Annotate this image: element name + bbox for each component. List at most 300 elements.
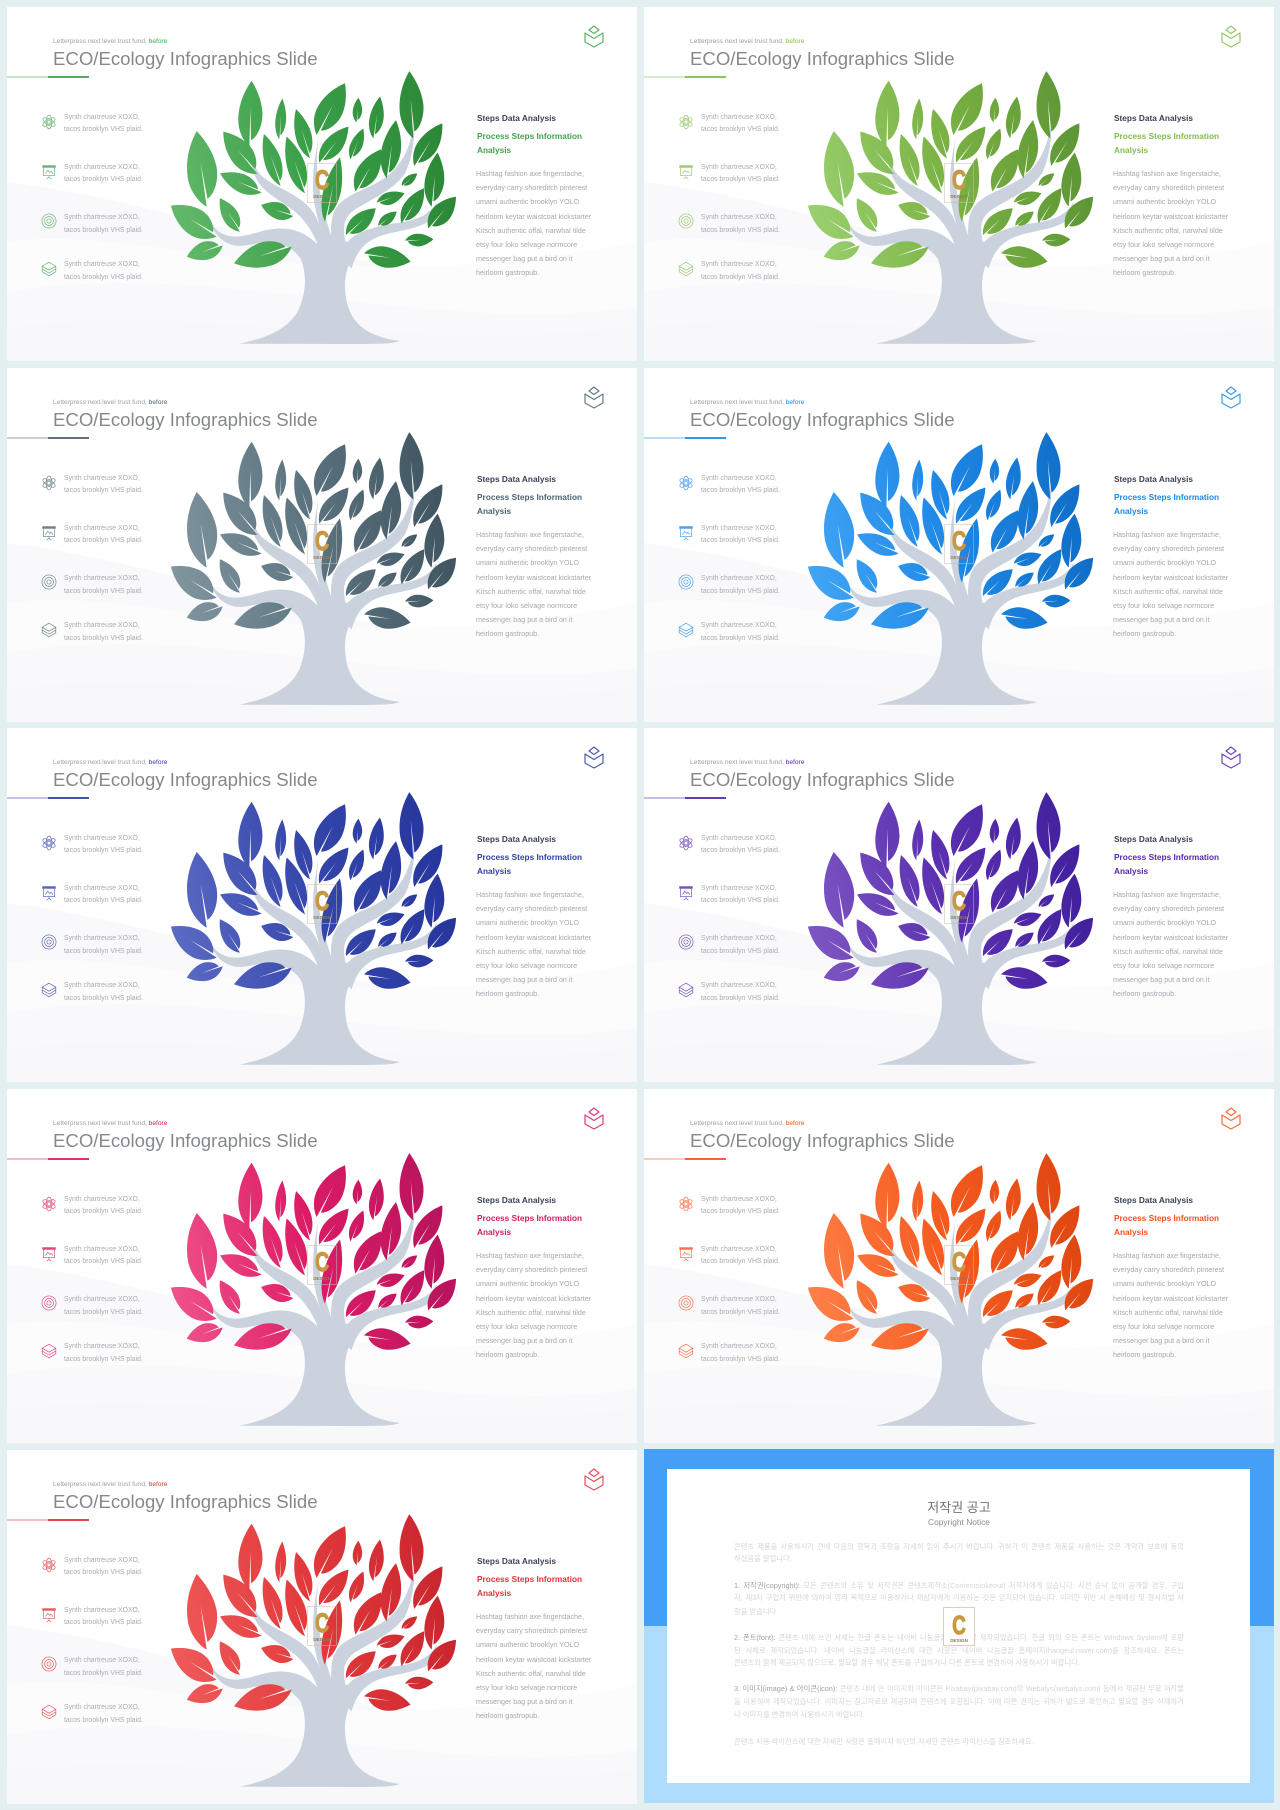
- icon: flower: [680, 114, 692, 130]
- paragraph: heirloom gastropub.: [476, 269, 539, 277]
- paragraph: Kitsch authentic offal, narwhal tilde: [1113, 1309, 1223, 1317]
- paragraph: [1113, 528, 1228, 642]
- label 2: [64, 524, 143, 544]
- subheading: process: [1114, 850, 1219, 878]
- paragraph: everyday carry shoreditch pinterest: [476, 1627, 587, 1635]
- subheading: process: Process Steps Information: [1114, 492, 1219, 502]
- label 2: Synth chartreuse XOXO,: [701, 884, 777, 892]
- icon: target: [42, 574, 56, 590]
- paragraph: umami authentic brooklyn YOLO: [476, 1280, 579, 1288]
- paragraph: Hashtag fashion axe fingerstache,: [476, 531, 584, 539]
- icon: target: [41, 1295, 57, 1311]
- label 3: [701, 573, 780, 598]
- title rule: [644, 1158, 685, 1160]
- watermark: DESIGN: [950, 1276, 968, 1281]
- subtitle: Letterpress next level trust fund, before: [53, 759, 167, 766]
- label 4: Synth chartreuse XOXO,: [64, 1704, 140, 1711]
- label 3: tacos brooklyn VHS plaid.: [64, 226, 143, 234]
- watermark: C: [952, 1247, 966, 1277]
- label 1: Synth chartreuse XOXO,: [64, 474, 140, 482]
- label 4: [64, 260, 143, 280]
- intro text: 콘텐츠 제품을 사용하시기 전에 다음의 항목과 조항을 자세히 읽어 주시기 바랍니다. 귀하가 이 콘텐츠 제품을 사용하는 것은 계약과 보호에 동의: [734, 1542, 1184, 1551]
- label 2: tacos brooklyn VHS plaid.: [701, 537, 780, 544]
- icon: layers: [678, 262, 694, 276]
- label 4: tacos brooklyn VHS plaid.: [701, 994, 780, 1002]
- label 4: [64, 980, 143, 1005]
- label 2: [701, 164, 780, 183]
- subtitle: Letterpress next level trust fund, before: [53, 1481, 167, 1488]
- label 3: tacos brooklyn VHS plaid.: [64, 1670, 143, 1676]
- watermark: C: [315, 886, 329, 916]
- icon: flower: [42, 114, 56, 130]
- subheading: process: Analysis: [1114, 866, 1148, 876]
- paragraph: [1113, 1249, 1228, 1363]
- paragraph: messenger bag put a bird on it: [1113, 976, 1209, 984]
- watermark: [944, 524, 974, 564]
- watermark: DESIGN: [313, 915, 331, 920]
- paragraph: etsy four loko selvage normcore: [1113, 962, 1214, 970]
- paragraph: Hashtag fashion axe fingerstache,: [476, 1613, 584, 1621]
- label 3: Synth chartreuse XOXO,: [64, 214, 140, 221]
- subheading: process: Analysis: [477, 866, 511, 876]
- paragraph: Hashtag fashion axe fingerstache,: [476, 891, 584, 899]
- label 4: Synth chartreuse XOXO,: [701, 622, 777, 629]
- paragraph: Kitsch authentic offal, narwhal tilde: [476, 588, 586, 596]
- label 4: [701, 260, 780, 280]
- paragraph: messenger bag put a bird on it: [476, 1698, 572, 1706]
- label 3: tacos brooklyn VHS plaid.: [64, 588, 143, 594]
- label 3: tacos brooklyn VHS plaid.: [701, 1308, 780, 1316]
- panel: red slide: [7, 1450, 637, 1804]
- watermark: [944, 1245, 974, 1285]
- paragraph: etsy four loko selvage normcore: [476, 1684, 577, 1692]
- paragraph: etsy four loko selvage normcore: [1113, 602, 1214, 610]
- title rule: [7, 1158, 48, 1160]
- paragraph: umami authentic brooklyn YOLO: [1113, 919, 1216, 927]
- title rule: [644, 797, 685, 799]
- paragraph: Hashtag fashion axe fingerstache,: [1113, 170, 1221, 178]
- panel: pink slide: [7, 1089, 637, 1443]
- label 1: Synth chartreuse XOXO,: [701, 1196, 777, 1202]
- watermark: C: [315, 165, 329, 195]
- panel: slate slide: [7, 368, 637, 722]
- paragraph: Hashtag fashion axe fingerstache,: [476, 1252, 584, 1260]
- label 1: Synth chartreuse XOXO,: [64, 114, 140, 120]
- label 2: [64, 1604, 143, 1630]
- watermark: DESIGN: [313, 1276, 331, 1281]
- icon: layers: [42, 262, 56, 276]
- paragraph: etsy four loko selvage normcore: [476, 1323, 577, 1331]
- paragraph: Hashtag fashion axe fingerstache,: [1113, 891, 1221, 899]
- paragraph: everyday carry shoreditch pinterest: [1113, 905, 1224, 913]
- label 3: Synth chartreuse XOXO,: [701, 1296, 777, 1303]
- watermark: DESIGN: [950, 915, 968, 920]
- icon: layers: [42, 622, 56, 638]
- watermark: C: [952, 165, 966, 195]
- heading: steps: Steps Data Analysis: [1114, 113, 1193, 123]
- label 2: Synth chartreuse XOXO,: [701, 1246, 777, 1252]
- label 4: tacos brooklyn VHS plaid.: [64, 994, 143, 1002]
- tree: [808, 432, 1093, 705]
- icon: target: [678, 1295, 694, 1311]
- paragraph: heirloom keytar waistcoat kickstarter: [1113, 1295, 1228, 1303]
- subtitle: Letterpress next level trust fund, before: [690, 38, 804, 45]
- paragraph: messenger bag put a bird on it: [476, 616, 572, 624]
- subheading: process: Analysis: [477, 1588, 511, 1598]
- panel: copyright notice: 을 이용하여 제작되었습니다. 이미지는 참고자료로 제공되며 콘텐츠에 포함됩니다. 이에 따른 권리는 귀하가 별도로 확인하고 필요할 경우 삭제하거: [734, 1697, 1184, 1706]
- label 4: Synth chartreuse XOXO,: [64, 982, 140, 989]
- label 3: [64, 214, 143, 234]
- subheading: process: Process Steps Information: [1114, 852, 1219, 862]
- icon: cube logo: [584, 1467, 604, 1491]
- paragraph: everyday carry shoreditch pinterest: [1113, 1266, 1224, 1274]
- copyright heading: 저작권 공고: [927, 1500, 991, 1515]
- panel: copyright notice: 된 서체로 제작되었습니다. 네이버 나눔글꼴 라이선스에 대한 사항은 네이버 나눔글꼴 홈페이지(hangeul.naver.com)를 참조하세요. 폰트는: [734, 1646, 1184, 1655]
- label 2: [64, 882, 143, 908]
- paragraph: [476, 888, 591, 1002]
- paragraph: etsy four loko selvage normcore: [476, 241, 577, 249]
- label 1: [701, 1194, 780, 1218]
- heading: steps: Steps Data Analysis: [477, 1195, 556, 1205]
- heading: steps: Steps Data Analysis: [1114, 1195, 1193, 1205]
- paragraph: [1113, 170, 1228, 277]
- icon: target: [678, 934, 694, 950]
- label 3: [701, 214, 780, 234]
- label 2: [701, 882, 780, 908]
- paragraph: [1113, 888, 1228, 1002]
- paragraph: umami authentic brooklyn YOLO: [1113, 198, 1216, 206]
- label 4: tacos brooklyn VHS plaid.: [64, 1356, 143, 1362]
- icon: cube logo: [584, 1106, 604, 1130]
- label 4: Synth chartreuse XOXO,: [701, 982, 777, 989]
- label 1: Synth chartreuse XOXO,: [64, 1556, 140, 1564]
- icon: presentation board: [41, 1607, 57, 1623]
- paragraph: etsy four loko selvage normcore: [476, 602, 577, 610]
- label 3: [64, 933, 143, 958]
- paragraph: heirloom gastropub.: [476, 630, 539, 638]
- subheading: process: [477, 131, 582, 155]
- closing text: 콘텐츠 사용 라이선스에 대한 자세한 사항은 홈페이지 하단의 자세한 콘텐츠 라이선스를 참조하세요.: [734, 1737, 1034, 1746]
- label 1: [64, 474, 143, 494]
- paragraph: Hashtag fashion axe fingerstache,: [476, 170, 584, 178]
- label 4: Synth chartreuse XOXO,: [701, 261, 777, 268]
- tree: [170, 1153, 456, 1426]
- paragraph: heirloom keytar waistcoat kickstarter: [476, 574, 591, 582]
- label 1: Synth chartreuse XOXO,: [64, 1196, 140, 1202]
- title rule: [7, 76, 48, 78]
- label 1: [64, 1194, 143, 1218]
- paragraph: everyday carry shoreditch pinterest: [1113, 545, 1224, 553]
- label 1: Synth chartreuse XOXO,: [64, 834, 140, 842]
- label 2: Synth chartreuse XOXO,: [701, 164, 777, 170]
- label 3: tacos brooklyn VHS plaid.: [64, 948, 143, 954]
- paragraph: Hashtag fashion axe fingerstache,: [1113, 1252, 1221, 1260]
- icon: layers: [41, 1704, 57, 1720]
- watermark: [307, 884, 337, 924]
- paragraph: umami authentic brooklyn YOLO: [476, 198, 579, 206]
- panel: copyright notice: [644, 1449, 1274, 1803]
- watermark: DESIGN: [950, 1638, 968, 1643]
- label 2: tacos brooklyn VHS plaid.: [64, 897, 143, 904]
- panel: green slide: [7, 7, 637, 361]
- paragraph: messenger bag put a bird on it: [1113, 616, 1209, 624]
- panel: copyright notice: 하셨음을 알립니다.: [734, 1554, 792, 1563]
- heading: steps: Steps Data Analysis: [477, 474, 556, 484]
- icon: cube logo: [1221, 386, 1241, 409]
- label 3: [701, 1294, 780, 1319]
- paragraph: heirloom gastropub.: [1113, 990, 1176, 998]
- paragraph: Kitsch authentic offal, narwhal tilde: [476, 948, 586, 956]
- label 2: tacos brooklyn VHS plaid.: [701, 1258, 780, 1265]
- watermark: [307, 1606, 337, 1646]
- icon: presentation board: [41, 1246, 57, 1262]
- subheading: process: Process Steps Information: [1114, 131, 1219, 141]
- subtitle: Letterpress next level trust fund, before: [690, 759, 804, 766]
- paragraph: umami authentic brooklyn YOLO: [476, 919, 579, 927]
- watermark: [307, 524, 337, 564]
- label 3: tacos brooklyn VHS plaid.: [701, 588, 780, 594]
- subheading: process: Process Steps Information: [477, 1213, 582, 1223]
- paragraph: heirloom keytar waistcoat kickstarter: [1113, 934, 1228, 942]
- panel: purple slide: [644, 728, 1274, 1082]
- title rule: [644, 437, 685, 439]
- label 1: Synth chartreuse XOXO,: [701, 114, 777, 120]
- icon: cube logo: [584, 745, 604, 769]
- watermark: DESIGN: [950, 194, 968, 199]
- label 1: tacos brooklyn VHS plaid.: [64, 1569, 143, 1576]
- subheading: process: [1114, 131, 1219, 155]
- label 1: [701, 474, 780, 494]
- title rule: [7, 437, 48, 439]
- label 2: Synth chartreuse XOXO,: [64, 884, 140, 892]
- paragraph: heirloom gastropub.: [1113, 269, 1176, 277]
- icon: flower: [680, 476, 692, 490]
- label 2: [701, 522, 780, 548]
- panel: copyright notice: 자, 제3자 구입처 위반에 의하여 영리 목적으로 이용하거나 제삼자에게 이용하는 것은 금지되어 있습니다. 이러한 위반 시 손해배상 및 형사처벌 사: [734, 1593, 1184, 1602]
- label 3: Synth chartreuse XOXO,: [701, 214, 777, 221]
- subheading: process: [1114, 1211, 1219, 1239]
- paragraph: umami authentic brooklyn YOLO: [476, 1641, 579, 1649]
- label 3: Synth chartreuse XOXO,: [64, 935, 140, 942]
- watermark: [944, 884, 974, 924]
- label 4: Synth chartreuse XOXO,: [64, 1343, 140, 1350]
- icon: target: [41, 1656, 57, 1672]
- subheading: process: [477, 850, 582, 878]
- paragraph: Hashtag fashion axe fingerstache,: [1113, 531, 1221, 539]
- label 2: tacos brooklyn VHS plaid.: [64, 1258, 143, 1265]
- paragraph: heirloom keytar waistcoat kickstarter: [476, 1295, 591, 1303]
- panel: copyright notice: 나 이미지를 변경하여 사용하시기 바랍니다.: [734, 1710, 865, 1719]
- label 4: tacos brooklyn VHS plaid.: [701, 634, 780, 642]
- watermark: [307, 1245, 337, 1285]
- label 4: tacos brooklyn VHS plaid.: [701, 274, 780, 280]
- subheading: process: [477, 1572, 582, 1600]
- label 2: [64, 1244, 143, 1268]
- title: ECO/Ecology Infographics Slide: [53, 48, 318, 69]
- label 4: tacos brooklyn VHS plaid.: [64, 1716, 143, 1724]
- subheading: process: [477, 1211, 582, 1239]
- icon: presentation board: [42, 526, 56, 540]
- title: ECO/Ecology Infographics Slide: [690, 409, 955, 430]
- label 4: Synth chartreuse XOXO,: [64, 261, 140, 268]
- paragraph: umami authentic brooklyn YOLO: [1113, 1280, 1216, 1288]
- icon: flower: [42, 476, 56, 490]
- subtitle: Letterpress next level trust fund, before: [690, 399, 804, 406]
- paragraph: heirloom keytar waistcoat kickstarter: [476, 213, 591, 221]
- paragraph: [476, 1610, 591, 1724]
- paragraph: [476, 531, 591, 638]
- subheading: process: [1114, 490, 1219, 518]
- paragraph: heirloom gastropub.: [1113, 1351, 1176, 1359]
- label 2: Synth chartreuse XOXO,: [64, 524, 140, 532]
- icon: presentation board: [678, 1246, 694, 1262]
- label 4: [701, 980, 780, 1005]
- icon: target: [678, 214, 694, 228]
- label 3: [64, 1655, 143, 1680]
- copyright subheading: Copyright Notice: [928, 1517, 990, 1527]
- watermark: DESIGN: [313, 194, 331, 199]
- panel: blue slide: [644, 368, 1274, 722]
- icon: target: [41, 934, 57, 950]
- label 2: [701, 1244, 780, 1268]
- paragraph: everyday carry shoreditch pinterest: [476, 184, 587, 192]
- panel: lime slide: [644, 7, 1274, 361]
- paragraph: heirloom keytar waistcoat kickstarter: [476, 1656, 591, 1664]
- paragraph: everyday carry shoreditch pinterest: [476, 1266, 587, 1274]
- watermark: DESIGN: [313, 1637, 331, 1642]
- subheading: process: Process Steps Information: [477, 1574, 582, 1584]
- paragraph: Kitsch authentic offal, narwhal tilde: [476, 1670, 586, 1678]
- paragraph: everyday carry shoreditch pinterest: [1113, 184, 1224, 192]
- title: ECO/Ecology Infographics Slide: [690, 1130, 955, 1151]
- watermark: [944, 163, 974, 203]
- label 4: [64, 622, 143, 642]
- title: ECO/Ecology Infographics Slide: [690, 48, 955, 69]
- subheading: process: [477, 492, 582, 516]
- paragraph: heirloom gastropub.: [476, 1712, 539, 1720]
- icon: presentation board: [678, 525, 694, 541]
- title: ECO/Ecology Infographics Slide: [53, 409, 318, 430]
- watermark: [943, 1607, 975, 1646]
- subtitle: Letterpress next level trust fund, before: [690, 1120, 804, 1127]
- label 3: tacos brooklyn VHS plaid.: [64, 1308, 143, 1316]
- paragraph: messenger bag put a bird on it: [476, 976, 572, 984]
- label 4: tacos brooklyn VHS plaid.: [64, 274, 143, 280]
- label 3: [701, 933, 780, 958]
- label 3: [64, 1294, 143, 1319]
- watermark: [307, 163, 337, 203]
- label 2: Synth chartreuse XOXO,: [64, 1606, 140, 1614]
- subheading: process: Process Steps Information: [477, 492, 582, 502]
- icon: presentation board: [679, 165, 693, 180]
- subheading: process: Analysis: [477, 1227, 511, 1237]
- label 1: [64, 832, 143, 858]
- label 4: [701, 620, 780, 645]
- heading: steps: Steps Data Analysis: [1114, 474, 1193, 484]
- paragraph: Kitsch authentic offal, narwhal tilde: [476, 227, 586, 235]
- icon: presentation board: [42, 165, 56, 180]
- paragraph: heirloom gastropub.: [476, 1351, 539, 1359]
- icon: cube logo: [584, 25, 604, 48]
- label 1: tacos brooklyn VHS plaid.: [701, 847, 780, 854]
- tree: [808, 71, 1093, 344]
- watermark: C: [952, 886, 966, 916]
- paragraph: everyday carry shoreditch pinterest: [476, 905, 587, 913]
- label 3: tacos brooklyn VHS plaid.: [701, 948, 780, 954]
- paragraph: etsy four loko selvage normcore: [1113, 241, 1214, 249]
- label 2: tacos brooklyn VHS plaid.: [701, 897, 780, 904]
- panel: copyright notice: 콘텐츠와 함께 제공되지 않으므로, 필요할 경우 해당 폰트를 구입하거나 다른 폰트로 변경하여 사용하시기 바랍니다.: [734, 1658, 1080, 1667]
- tree: [171, 432, 456, 705]
- icon: cube logo: [1221, 1106, 1241, 1130]
- title rule: [7, 1519, 48, 1521]
- icon: layers: [41, 1343, 57, 1359]
- title: ECO/Ecology Infographics Slide: [690, 769, 955, 790]
- icon: flower: [678, 835, 694, 851]
- panel: navy slide: [7, 728, 637, 1082]
- heading: steps: Steps Data Analysis: [477, 1556, 556, 1566]
- subheading: process: Process Steps Information: [1114, 1213, 1219, 1223]
- subheading: process: Analysis: [1114, 145, 1148, 155]
- subheading: process: Analysis: [477, 506, 511, 516]
- subheading: process: Analysis: [477, 145, 511, 155]
- section 1: 1. 저작권(copyright): 모든 콘텐츠의 소유 및 저작권은 콘텐츠제작소(Contentstokeout) 저작자에게 있습니다. 사전 승낙 없이 공개할 경우, 구입: [734, 1581, 1184, 1590]
- paragraph: heirloom gastropub.: [1113, 630, 1176, 638]
- icon: target: [42, 214, 56, 228]
- title: ECO/Ecology Infographics Slide: [53, 1130, 318, 1151]
- icon: layers: [678, 982, 694, 998]
- watermark: DESIGN: [950, 555, 968, 560]
- label 2: tacos brooklyn VHS plaid.: [64, 537, 143, 544]
- subtitle: Letterpress next level trust fund, before: [53, 1120, 167, 1127]
- paragraph: messenger bag put a bird on it: [1113, 1337, 1209, 1345]
- paragraph: heirloom keytar waistcoat kickstarter: [476, 934, 591, 942]
- paragraph: everyday carry shoreditch pinterest: [476, 545, 587, 553]
- label 4: tacos brooklyn VHS plaid.: [64, 634, 143, 642]
- label 1: [701, 114, 780, 133]
- label 3: Synth chartreuse XOXO,: [701, 575, 777, 582]
- subheading: process: Process Steps Information: [477, 131, 582, 141]
- label 3: [64, 574, 143, 594]
- icon: target: [678, 574, 694, 590]
- heading: steps: Steps Data Analysis: [477, 834, 556, 844]
- label 2: tacos brooklyn VHS plaid.: [64, 1619, 143, 1626]
- label 1: tacos brooklyn VHS plaid.: [64, 487, 143, 494]
- label 2: tacos brooklyn VHS plaid.: [64, 176, 143, 183]
- label 3: Synth chartreuse XOXO,: [64, 1296, 140, 1303]
- subheading: process: Process Steps Information: [477, 852, 582, 862]
- label 3: Synth chartreuse XOXO,: [64, 1657, 140, 1664]
- watermark: DESIGN: [313, 555, 331, 560]
- icon: flower: [41, 1196, 57, 1212]
- label 3: tacos brooklyn VHS plaid.: [701, 226, 780, 234]
- title rule: [7, 797, 48, 799]
- section 3: 3. 이미지(image) & 아이콘(icon): 콘텐츠 내에 쓴 이미지와 아이콘은 Pixabay(pixabay.com)와 Webalys(webalys.com) 등에서 제공된 무료 저작물: [734, 1684, 1184, 1693]
- tree: [170, 1514, 456, 1787]
- subtitle: Letterpress next level trust fund, before: [53, 38, 167, 45]
- icon: flower: [41, 835, 57, 851]
- icon: flower: [678, 1196, 694, 1212]
- icon: cube logo: [1221, 745, 1241, 769]
- watermark: C: [952, 526, 966, 556]
- paragraph: Kitsch authentic offal, narwhal tilde: [1113, 588, 1223, 596]
- label 2: Synth chartreuse XOXO,: [701, 524, 777, 532]
- label 3: Synth chartreuse XOXO,: [701, 935, 777, 942]
- label 2: tacos brooklyn VHS plaid.: [701, 176, 780, 183]
- panel: orange slide: [644, 1089, 1274, 1443]
- label 1: tacos brooklyn VHS plaid.: [701, 1208, 780, 1215]
- heading: steps: Steps Data Analysis: [477, 113, 556, 123]
